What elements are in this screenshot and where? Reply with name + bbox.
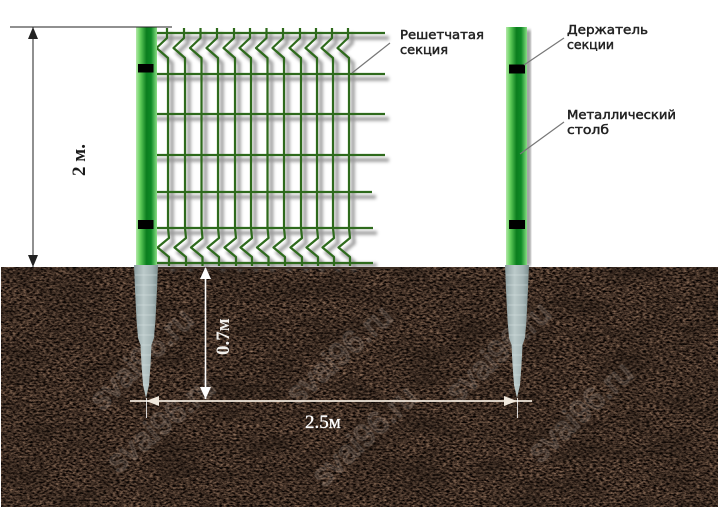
label: lattice section: секция [400, 43, 448, 57]
right post shadow [525, 30, 531, 266]
watermarks: svai96.ru [82, 294, 640, 493]
right screw pile [505, 265, 529, 398]
label: lattice section: Решетчатая [400, 28, 484, 42]
right post holder top [509, 64, 525, 74]
leader line: section holder [524, 38, 564, 65]
soil ground [1, 267, 718, 507]
cover over shadow below ground line [157, 267, 397, 269]
watermarks: svai96.ru: svai96.ru [520, 354, 640, 469]
label: metal post: столб [567, 123, 609, 137]
leader line: lattice section [352, 43, 390, 73]
leader line: metal post [520, 122, 564, 154]
watermarks: svai96.ru: svai96.ru [304, 378, 424, 493]
left post holder bottom [138, 220, 154, 229]
watermarks: svai96.ru: svai96.ru [82, 301, 200, 417]
2 m label: 2 м. [69, 144, 90, 176]
label: metal post: Металлический [567, 108, 676, 122]
2.5 m label: 2.5м [305, 412, 341, 433]
lattice fence section [150, 28, 385, 266]
0.7 m depth dimension arrow [200, 267, 211, 399]
watermarks: svai96.ru: svai96.ru [279, 298, 399, 411]
watermarks: svai96.ru: svai96.ru [438, 294, 558, 409]
label: section holder: Держатель [567, 23, 648, 37]
fence section shadow [154, 33, 389, 271]
right post holder bottom [509, 220, 525, 229]
0.7 m label: 0.7м [213, 318, 234, 355]
left screw pile [134, 265, 158, 398]
watermarks: svai96.ru: svai96.ru [99, 368, 222, 479]
2.5 m width dimension arrow [130, 396, 532, 418]
left post holder top [138, 64, 154, 72]
left metal post [136, 27, 157, 267]
right metal post [506, 27, 527, 267]
2 m height dimension arrow [10, 27, 172, 267]
label: section holder: секции [567, 38, 614, 52]
